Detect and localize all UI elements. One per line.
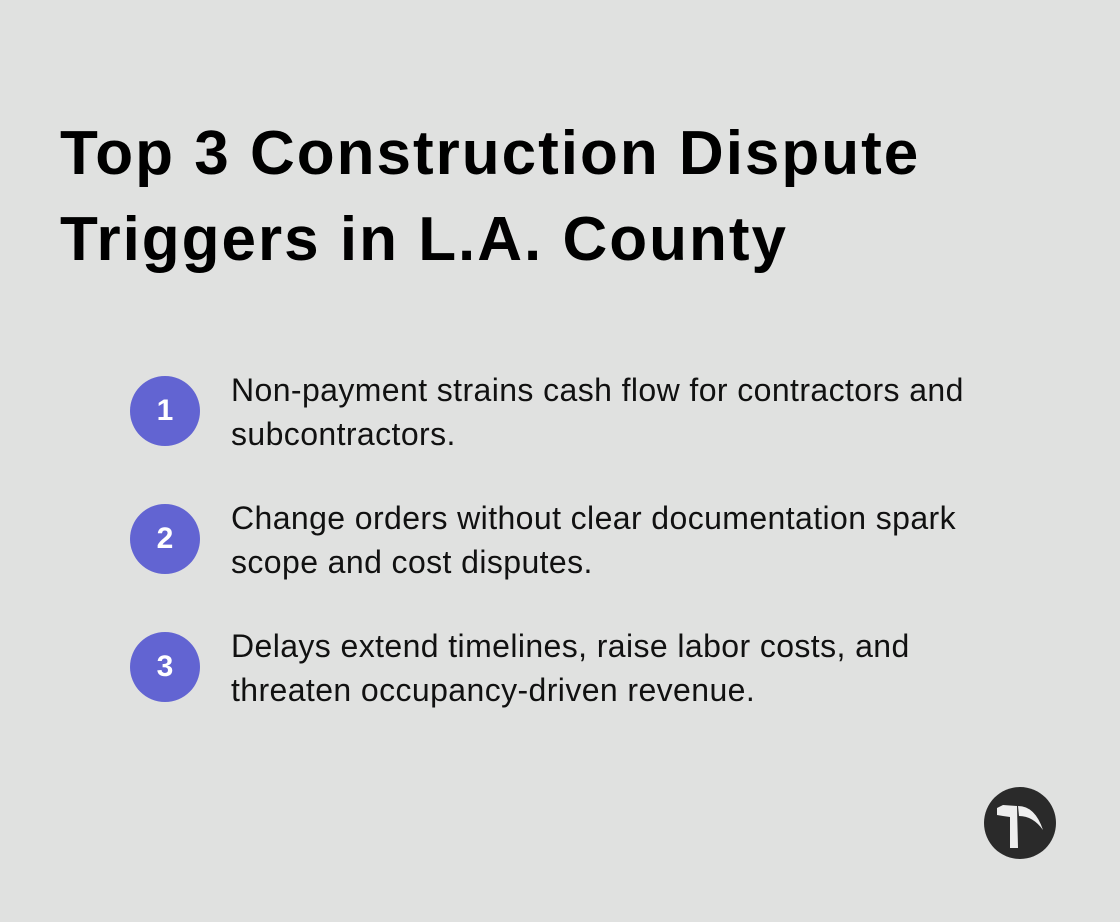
title: Triggers in L.A. County	[60, 205, 788, 274]
text 2: Change orders without clear documentation spark	[231, 500, 956, 536]
icon: hammer logo	[984, 787, 1056, 859]
item 2	[130, 500, 956, 580]
title	[60, 119, 920, 274]
number badge 1	[130, 376, 200, 446]
item 1	[130, 372, 964, 452]
text 2	[231, 500, 956, 580]
text 2: scope and cost disputes.	[231, 544, 593, 580]
number badge 3: 3	[157, 650, 173, 683]
number badge 3	[130, 632, 200, 702]
text 3: Delays extend timelines, raise labor costs, and	[231, 628, 910, 664]
text 3: threaten occupancy-driven revenue.	[231, 672, 755, 708]
item 3	[130, 628, 910, 708]
text 1	[231, 372, 964, 452]
text 1: subcontractors.	[231, 416, 456, 452]
number badge 2: 2	[157, 522, 173, 555]
number badge 1: 1	[157, 394, 173, 427]
text 3	[231, 628, 910, 708]
number badge 2	[130, 504, 200, 574]
title: Top 3 Construction Dispute	[60, 119, 920, 188]
text 1: Non-payment strains cash flow for contractors and	[231, 372, 964, 408]
